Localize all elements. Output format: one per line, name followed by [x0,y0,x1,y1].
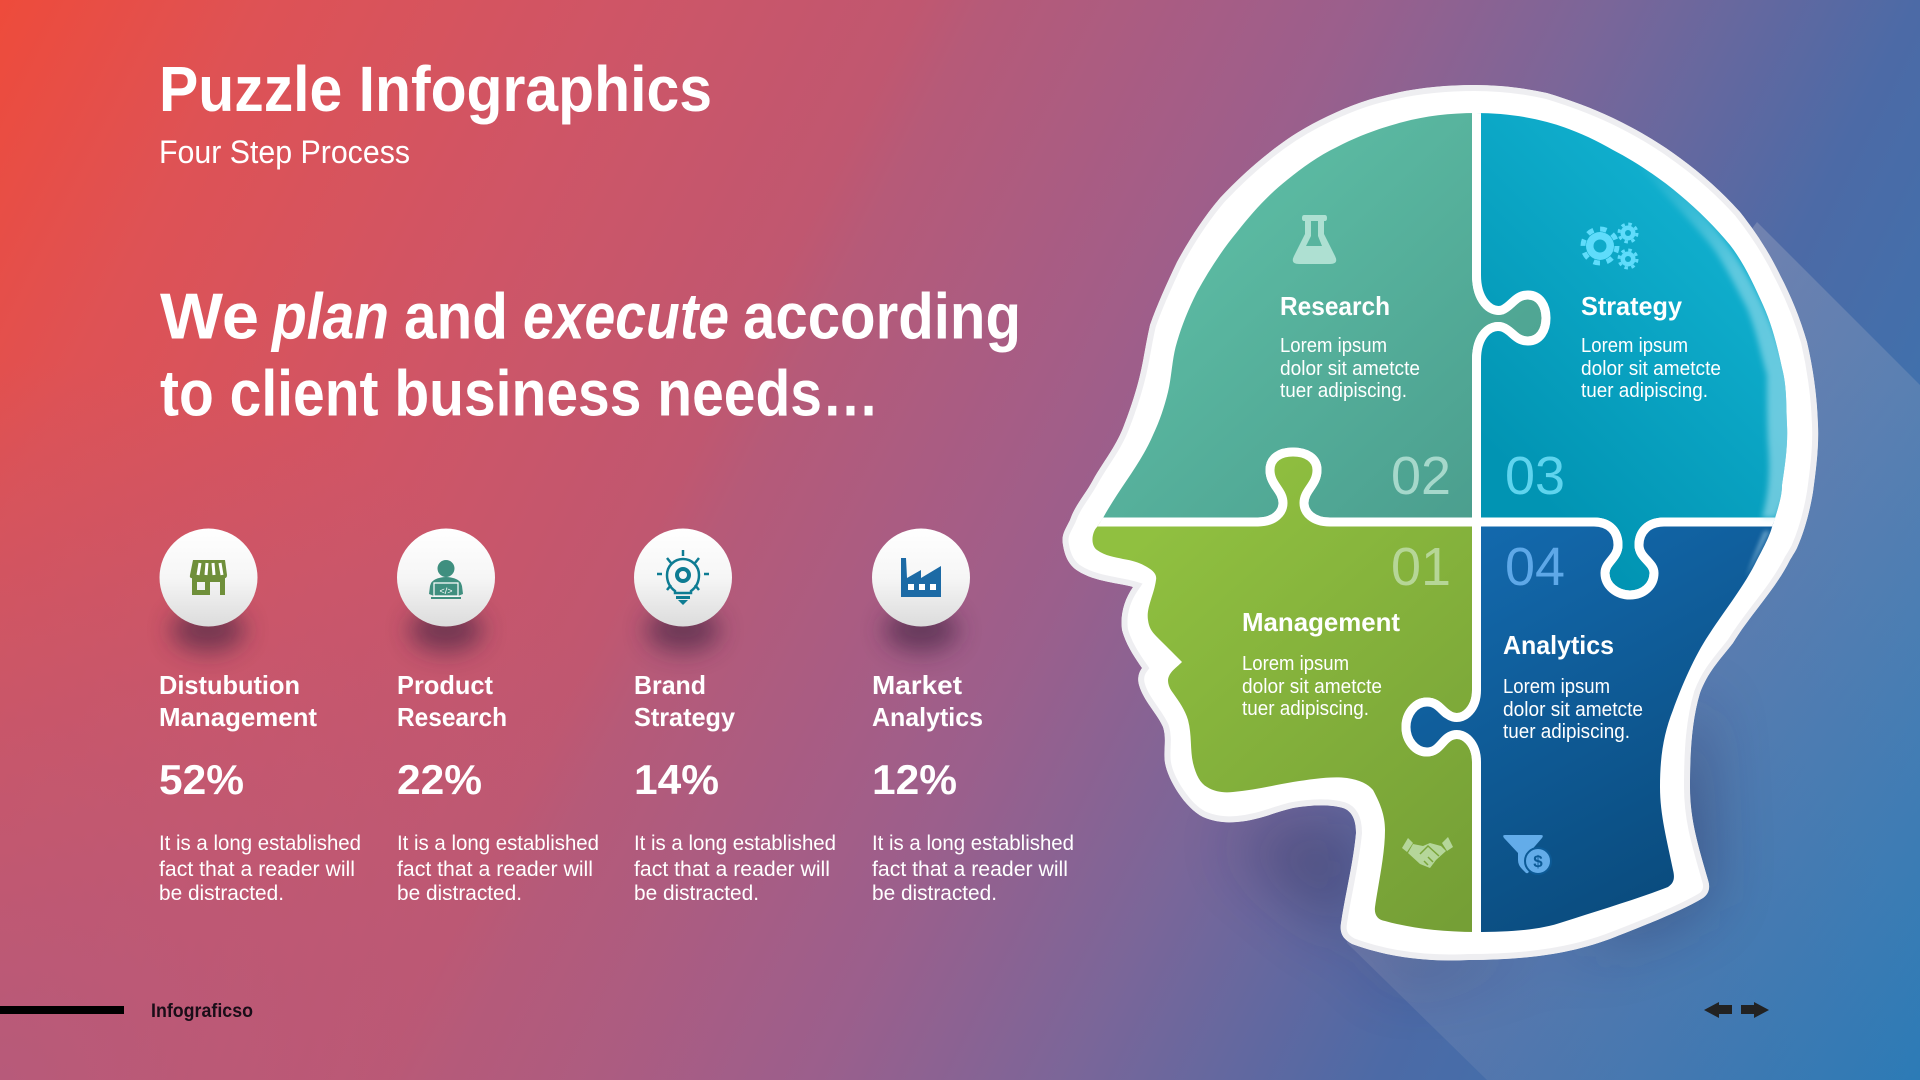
puzzle pieces [1092,113,1788,932]
icon: gears [1583,224,1637,268]
body: Lorem ipsum [1242,653,1349,675]
heading: Management [1242,607,1400,637]
headline: execute [523,280,729,352]
number: 02 [1391,446,1451,506]
icon: funnel with dollar: $ [1533,852,1543,871]
number: 04 [1505,537,1565,597]
description: fact that a reader will [872,858,1068,881]
number: 01 [1391,537,1451,597]
headline [160,280,1021,430]
label: Strategy [634,702,736,732]
headline: to client business needs… [160,356,879,430]
headline: We [160,280,259,352]
description: be distracted. [159,882,284,905]
icon: handshake [1402,837,1453,868]
heading: Analytics [1503,630,1614,660]
footer brand: Infograficso [151,1001,253,1022]
description: It is a long established [397,832,599,855]
body: Lorem ipsum [1280,335,1387,357]
description [634,832,836,905]
footer bar [0,1006,124,1014]
panel: research [1280,215,1451,506]
percentage: 52% [159,756,244,803]
heading: Strategy [1581,291,1683,321]
description: fact that a reader will [634,858,830,881]
description: fact that a reader will [397,858,593,881]
percentage: 14% [634,756,719,803]
icon badge: store [160,528,258,652]
label: Product [397,670,493,700]
body [1242,653,1382,720]
column: brand strategy [634,528,836,905]
body: dolor sit ametcte [1280,358,1420,380]
body: dolor sit ametcte [1242,676,1382,698]
label [872,670,983,732]
icon badge: person with laptop [397,528,495,652]
piece: research [1100,113,1542,522]
description: It is a long established [159,832,361,855]
percentage: 12% [872,756,957,803]
number: 03 [1505,446,1565,506]
description [872,832,1074,905]
body: Lorem ipsum [1503,676,1610,698]
body: tuer adipiscing. [1280,380,1407,402]
panel: management [1242,537,1453,868]
body [1503,676,1643,743]
icon: flask [1293,215,1336,264]
long shadow of head [1347,222,1920,1080]
label: Market [872,670,962,700]
gloss streak [1746,531,1770,578]
arrow: previous [1704,1002,1732,1018]
background corner tint [0,360,720,1080]
label [397,670,507,732]
label [634,670,736,732]
label: Management [159,702,317,732]
description: It is a long established [872,832,1074,855]
description [397,832,599,905]
description: It is a long established [634,832,836,855]
piece: management [1092,448,1472,932]
title: Puzzle Infographics [159,53,712,125]
icon: funnel with dollar [1503,835,1551,874]
icon badge: person with laptop: </> [439,586,453,596]
column: product research [397,528,599,905]
headline: and [404,280,508,352]
headline: according [743,280,1021,352]
panel: analytics [1503,537,1643,874]
column: distribution management [159,528,361,905]
body: tuer adipiscing. [1503,721,1630,743]
description: be distracted. [872,882,997,905]
icon badge: factory [872,528,970,652]
description: fact that a reader will [159,858,355,881]
gloss highlight [1648,172,1787,520]
head outline [1062,85,1818,960]
description [159,832,361,905]
heading: Research [1280,291,1390,321]
body: dolor sit ametcte [1503,699,1643,721]
body: dolor sit ametcte [1581,358,1721,380]
piece: strategy [1472,113,1788,590]
description: be distracted. [397,882,522,905]
body: tuer adipiscing. [1581,380,1708,402]
label: Brand [634,670,706,700]
body: Lorem ipsum [1581,335,1688,357]
body [1581,335,1721,402]
soft shadow under head [1230,690,1710,980]
arrow: next [1741,1002,1769,1018]
headline: plan [270,280,389,352]
column: market analytics [872,528,1074,905]
head puzzle [1062,85,1818,960]
icon badge: light bulb [634,528,732,652]
body [1280,335,1420,402]
description: be distracted. [634,882,759,905]
label: Distubution [159,670,300,700]
label: Research [397,702,507,732]
piece: analytics [1402,518,1775,932]
label: Analytics [872,702,983,732]
label [159,670,317,732]
panel: strategy [1505,224,1721,506]
body: tuer adipiscing. [1242,698,1369,720]
subtitle: Four Step Process [159,134,410,170]
percentage: 22% [397,756,482,803]
